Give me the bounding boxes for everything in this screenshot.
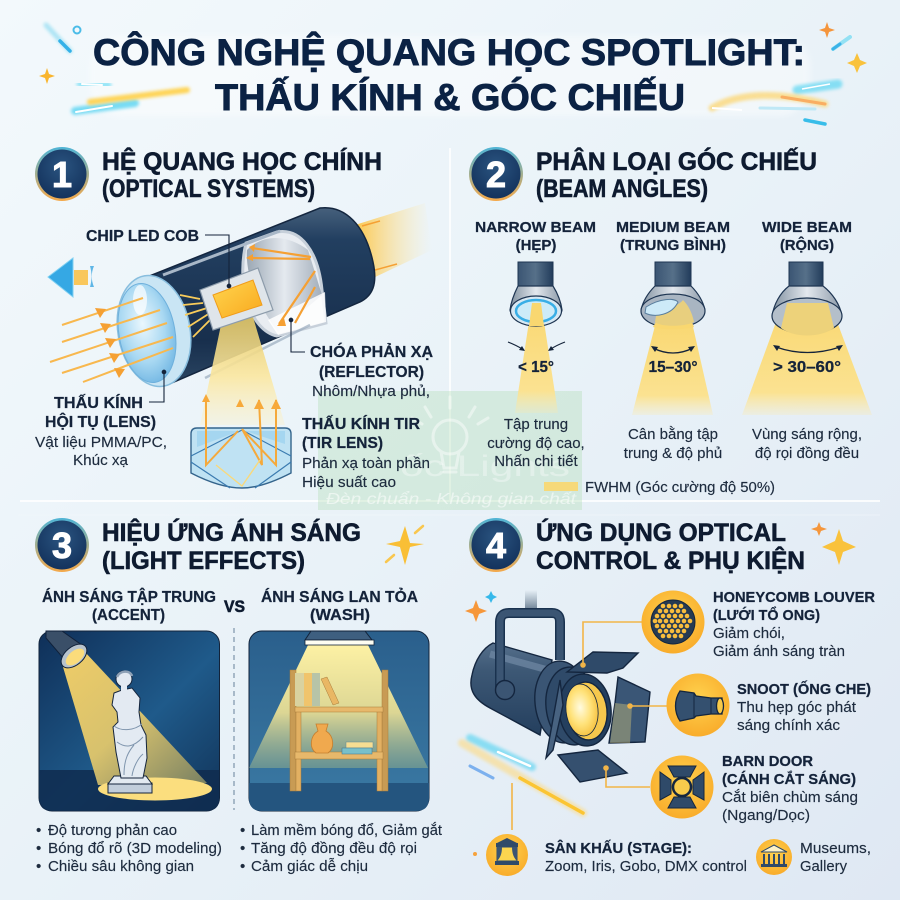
beam descriptions: Nhấn chi tiết — [494, 453, 579, 470]
beam labels: WIDE BEAM — [762, 219, 852, 236]
beam labels: (RỘNG) — [780, 236, 834, 254]
shelf — [290, 670, 388, 791]
label: converging lens: THẤU KÍNH — [54, 393, 143, 412]
icon: museum — [756, 839, 792, 875]
beam: narrow: < 15° — [518, 359, 554, 376]
vs label: VS — [224, 597, 245, 616]
text: stage: Zoom, Iris, Gobo, DMX control — [545, 858, 747, 875]
beam: narrow — [508, 262, 565, 413]
text: barn door: (CÁNH CẮT SÁNG) — [722, 770, 856, 788]
title: THẤU KÍNH & GÓC CHIẾU — [215, 76, 685, 118]
heading 3 — [102, 517, 361, 575]
cylinder body — [147, 208, 375, 385]
bullet list: wash: • — [240, 840, 245, 857]
bullet list: accent: Bóng đổ rõ (3D modeling) — [48, 840, 222, 857]
bullet list: accent: • — [36, 840, 41, 857]
barn door: bottom — [558, 750, 627, 782]
label: TIR lens: THẤU KÍNH TIR — [302, 414, 420, 433]
label: TIR lens: Hiệu suất cao — [302, 474, 396, 491]
heading 2: (BEAM ANGLES) — [536, 175, 708, 203]
label lines — [149, 235, 305, 402]
decorative streaks and sparkles, left of title — [39, 25, 187, 112]
subheading: wash: ÁNH SÁNG LAN TỎA — [261, 587, 418, 606]
label: reflector: Nhôm/Nhựa phủ, — [312, 383, 430, 400]
label: TIR lens: (TIR LENS) — [302, 435, 383, 452]
subheading: accent: ÁNH SÁNG TẬP TRUNG — [42, 587, 216, 606]
beam descriptions: Vùng sáng rộng, — [752, 426, 862, 443]
panel 3: light effects — [35, 517, 443, 875]
badge 2: 2 — [486, 154, 506, 195]
front lens — [555, 671, 615, 749]
subheading: wash: (WASH) — [310, 607, 370, 624]
icon: snoot — [666, 674, 730, 736]
legend: FWHM: FWHM (Góc cường độ 50%) — [585, 480, 775, 496]
heading 3: (LIGHT EFFECTS) — [102, 547, 305, 575]
watermark: ốc Lights — [400, 450, 570, 483]
badge 1: 1 — [52, 154, 72, 195]
panel 1: optical systems — [35, 146, 433, 491]
subheading: accent: (ACCENT) — [92, 607, 165, 624]
beam labels: NARROW BEAM — [475, 219, 596, 236]
text: honeycomb louver: Giảm chói, — [713, 625, 785, 642]
beam: medium: 15–30° — [648, 359, 698, 376]
decorative streaks and sparkles, right of title — [712, 22, 867, 124]
lens — [109, 270, 199, 392]
subheading: accent — [42, 587, 216, 624]
books — [295, 673, 339, 706]
text: stage — [545, 839, 747, 875]
incoming light rays — [50, 298, 173, 382]
connector lines — [512, 622, 667, 830]
badge 1 — [35, 147, 89, 201]
text: barn door: (Ngang/Dọc) — [722, 807, 810, 824]
heading 4: ỨNG DỤNG OPTICAL — [536, 517, 786, 547]
beam descriptions: Tập trung — [504, 416, 568, 433]
heading 2 — [536, 146, 817, 203]
bullet list: accent: Độ tương phản cao — [48, 822, 177, 839]
icon: barn door — [650, 756, 714, 818]
text: snoot — [737, 680, 871, 734]
heading 3: HIỆU ỨNG ÁNH SÁNG — [102, 517, 361, 547]
spotlight fixture — [471, 590, 650, 782]
label: converging lens: Vật liệu PMMA/PC, — [35, 434, 167, 451]
beam labels: MEDIUM BEAM — [616, 219, 730, 236]
beam labels: (TRUNG BÌNH) — [620, 237, 726, 254]
heading 4: CONTROL & PHỤ KIỆN — [536, 545, 805, 575]
title: CÔNG NGHỆ QUANG HỌC SPOTLIGHT: — [93, 31, 805, 73]
vase — [311, 724, 333, 753]
bullet list: accent: Chiều sâu không gian — [48, 858, 194, 875]
bullet list: wash: • — [240, 858, 245, 875]
chip LED — [200, 268, 273, 330]
watermark — [318, 391, 582, 510]
label: converging lens — [35, 393, 167, 469]
barn door: top — [567, 652, 638, 673]
book stack — [342, 742, 373, 754]
title — [90, 31, 810, 118]
text: museums: Gallery — [800, 858, 847, 875]
label: reflector: CHÓA PHẢN XẠ — [310, 342, 433, 361]
beam: medium — [632, 262, 713, 415]
heading 2: PHÂN LOẠI GÓC CHIẾU — [536, 146, 817, 176]
label: TIR lens: Phản xạ toàn phần — [302, 455, 430, 472]
bullet list: wash: Làm mềm bóng đổ, Giảm gắt — [251, 822, 443, 839]
beam descriptions: trung & độ phủ — [624, 445, 722, 462]
bullet list: accent: • — [36, 858, 41, 875]
beam labels — [475, 219, 852, 254]
beam: wide — [742, 262, 872, 415]
rear light beam — [355, 203, 432, 278]
label: chip LED COB: CHIP LED COB — [86, 228, 199, 245]
bullet list: wash — [240, 822, 443, 875]
text: snoot: sáng chính xác — [737, 717, 841, 734]
beam: wide: > 30–60° — [773, 359, 841, 376]
text: museums — [800, 840, 871, 875]
panel 2: beam angles — [469, 146, 872, 496]
label: TIR lens — [302, 414, 430, 491]
bullet list: accent: • — [36, 822, 41, 839]
reflector arrows — [246, 244, 315, 326]
light beam down — [200, 317, 285, 425]
beam descriptions — [487, 416, 862, 470]
heading 4 — [536, 517, 805, 575]
text: honeycomb louver: HONEYCOMB LOUVER — [713, 589, 875, 606]
icon: sparkle — [386, 526, 424, 565]
reflector window — [243, 232, 326, 336]
badge 4 — [469, 518, 523, 572]
bullet list: wash: • — [240, 822, 245, 839]
badge 4: 4 — [486, 525, 506, 566]
badge 3: 3 — [52, 525, 72, 566]
illustration: wash light on shelf — [249, 631, 429, 811]
heading 1: (OPTICAL SYSTEMS) — [102, 175, 315, 203]
icon: honeycomb louver — [642, 590, 704, 654]
TIR lens — [191, 394, 291, 488]
beam descriptions: Cân bằng tập — [628, 426, 718, 443]
label: converging lens: Khúc xạ — [73, 452, 129, 469]
bullet list: wash: Cảm giác dễ chịu — [251, 858, 368, 875]
badge 3 — [35, 518, 89, 572]
text: barn door: BARN DOOR — [722, 753, 813, 770]
barn door: right — [609, 677, 650, 743]
bullet list: wash: Tăng độ đồng đều độ rọi — [251, 840, 417, 857]
icon: sparkles — [811, 522, 856, 565]
beam descriptions: cường độ cao, — [487, 435, 585, 452]
subheading: wash — [261, 587, 418, 624]
text: stage: SÂN KHẤU (STAGE): — [545, 839, 692, 857]
bullet list: accent — [36, 822, 222, 875]
chip rays — [180, 295, 213, 337]
label: reflector — [310, 342, 433, 400]
text: snoot: Thu hẹp góc phát — [737, 699, 857, 716]
barn door: left — [546, 680, 563, 758]
text: barn door: Cắt biên chùm sáng — [722, 789, 858, 806]
beam labels: (HẸP) — [516, 237, 556, 254]
heading 1 — [102, 146, 382, 203]
beam descriptions: độ rọi đồng đều — [755, 445, 859, 462]
label: reflector: (REFLECTOR) — [319, 364, 424, 381]
badge 2 — [469, 147, 523, 201]
text: snoot: SNOOT (ỐNG CHE) — [737, 680, 871, 698]
illustration: accent light on statue — [39, 631, 220, 811]
watermark: Đèn chuẩn - Không gian chất — [326, 490, 577, 508]
label: converging lens: HỘI TỤ (LENS) — [45, 412, 156, 431]
text: honeycomb louver: (LƯỚI TỔ ONG) — [713, 606, 820, 624]
statue — [108, 671, 152, 793]
streaks and sparkles near spotlight — [462, 591, 583, 856]
text: honeycomb louver: Giảm ánh sáng tràn — [713, 643, 845, 660]
panel 4: optical control and accessories — [462, 517, 875, 876]
text: honeycomb louver — [713, 589, 875, 660]
heading 1: HỆ QUANG HỌC CHÍNH — [102, 146, 382, 176]
icon: small lens diagram — [48, 258, 94, 297]
text: museums: Museums, — [800, 840, 871, 857]
text: barn door — [722, 753, 858, 824]
icon: stage — [486, 834, 528, 876]
